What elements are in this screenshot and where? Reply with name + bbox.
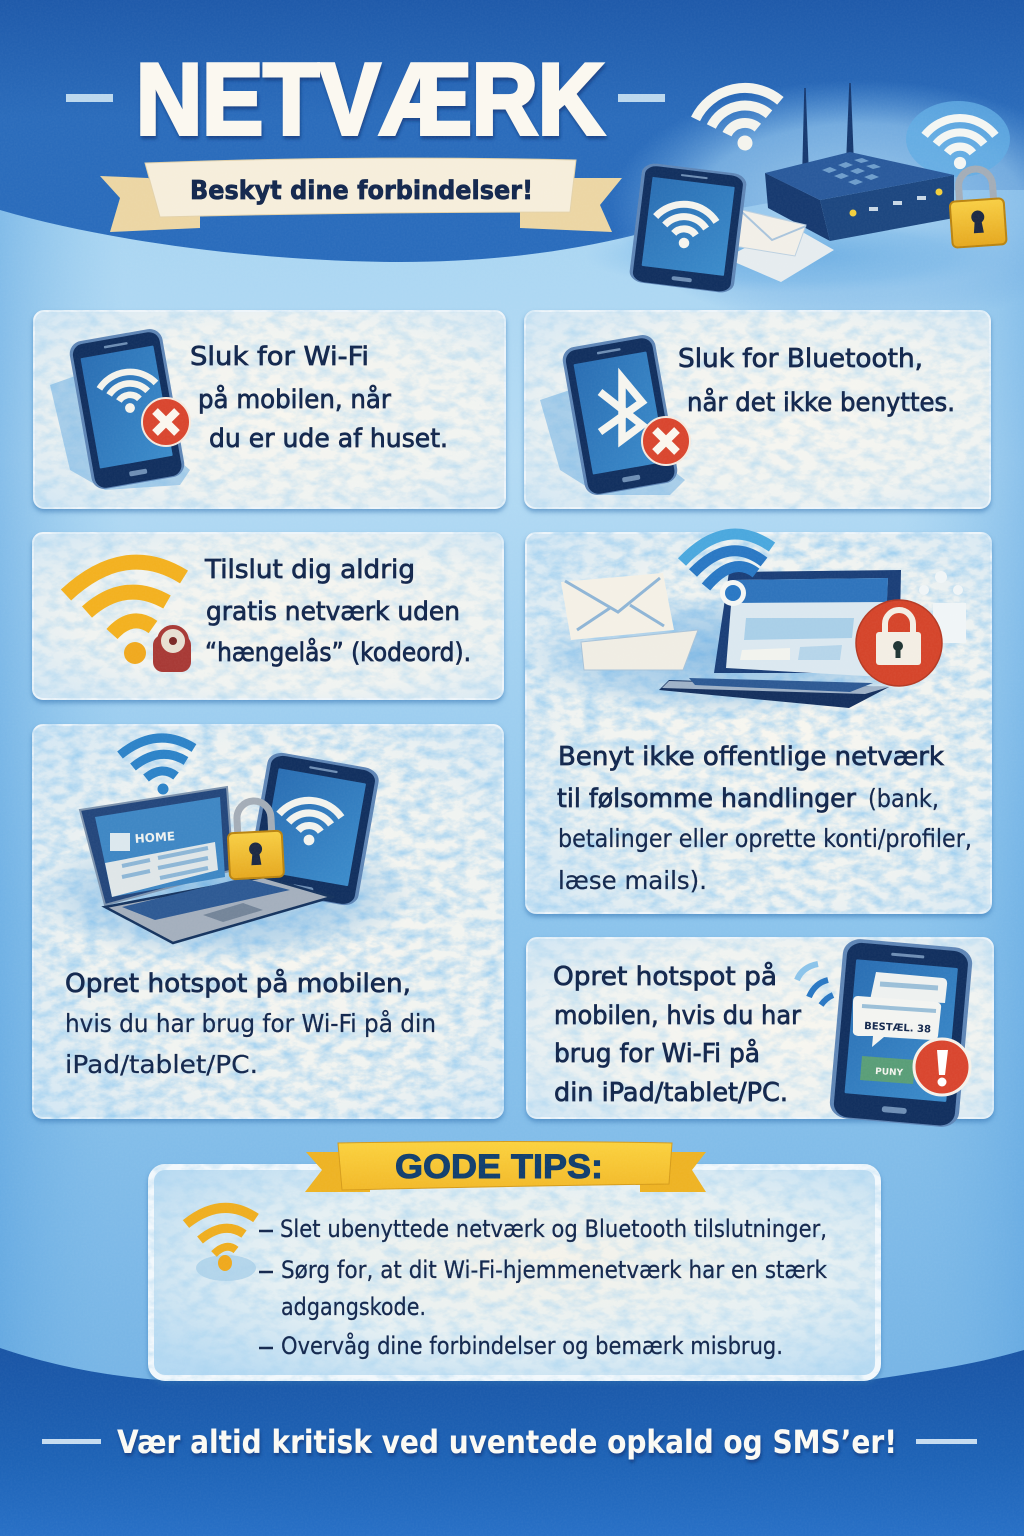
icon: wifi signal (691, 80, 789, 159)
icon: bluetooth (600, 378, 642, 440)
text: “hængelås” (kodeord). (205, 637, 471, 668)
text (678, 344, 955, 418)
header illustration: phone, router, lock and wifi (628, 80, 1010, 294)
text (190, 342, 448, 454)
subtitle ribbon: Beskyt dine forbindelser! (190, 176, 533, 206)
text: Sluk for Bluetooth, (678, 344, 923, 374)
title: NETVÆRK (136, 44, 604, 156)
icon: gold wifi (66, 562, 184, 634)
panel: tips: Overvåg dine forbindelser og bemærk misbrug. (281, 1331, 783, 1360)
icon: laptop (659, 570, 901, 708)
panel: bluetooth off (525, 311, 990, 508)
header band (0, 0, 1024, 262)
tips ribbon: GODE TIPS: (395, 1148, 603, 1186)
text: Slet ubenyttede netværk og Bluetooth tilslutninger, (280, 1215, 827, 1243)
text: brug for Wi-Fi på (554, 1038, 760, 1069)
header glow behind illustration (585, 80, 1024, 330)
icon: warning badge (914, 1039, 970, 1095)
panel: hotspot with phone (527, 938, 993, 1128)
icon: signal waves (797, 964, 833, 1005)
icon: phone with wifi and cross (68, 327, 186, 491)
text: du er ude af huset. (209, 424, 448, 454)
icon: phone with bluetooth and cross (561, 333, 679, 497)
icon: blue wifi (682, 534, 772, 606)
tips ribbon (305, 1142, 706, 1192)
icon: router (765, 83, 954, 241)
icon: phone shadow (540, 390, 685, 495)
panel: public networks: (bank, (868, 784, 939, 813)
text (553, 961, 801, 1108)
text: Opret hotspot på mobilen, (65, 968, 411, 999)
icon: phone with messages: BESTÆL. 38 (864, 1021, 931, 1035)
icon: phone with messages: PUNY (875, 1067, 904, 1078)
icon: tablet with wifi (245, 751, 381, 907)
subtitle ribbon (100, 158, 622, 232)
icon: red padlock (153, 627, 191, 672)
icon: laptop: HOME (134, 829, 176, 846)
icon: envelopes (725, 210, 834, 282)
icon: phone with messages (829, 938, 973, 1128)
panel: free networks (33, 533, 503, 699)
text (204, 555, 471, 668)
icon: decorative squares (919, 571, 966, 643)
bullet dashes (259, 1231, 273, 1348)
panel: wifi off (34, 311, 505, 508)
panel: tips: Sørg for, at dit Wi-Fi-hjemmenetværk har en stærk (281, 1256, 827, 1284)
text: på mobilen, når (198, 384, 391, 415)
icon: phone shadow (50, 375, 190, 490)
footer band (0, 1348, 1024, 1536)
text: gratis netværk uden (206, 597, 460, 627)
icon: phone with wifi (628, 162, 748, 294)
text: til følsomme handlinger (557, 784, 856, 814)
text: mobilen, hvis du har (554, 1001, 801, 1031)
panel: tips: adgangskode. (281, 1293, 426, 1321)
panel: public networks: betalinger eller oprette konti/profiler, (558, 824, 972, 853)
icon: laptop (80, 787, 332, 943)
text: Tilslut dig aldrig (204, 555, 415, 585)
panel: hotspot with laptop (30, 725, 503, 1118)
icon: red padlock badge (856, 600, 942, 686)
panel: public networks (520, 533, 991, 913)
icon: gold wifi (186, 1208, 256, 1281)
text: Sluk for Wi-Fi (190, 342, 369, 372)
panel: tips (151, 1142, 878, 1378)
icon: cloud wifi (906, 101, 1010, 177)
panel: public networks: læse mails). (558, 866, 707, 895)
text: din iPad/tablet/PC. (554, 1078, 788, 1108)
panel: hotspot with laptop: iPad/tablet/PC. (65, 1050, 258, 1079)
footer message: Vær altid kritisk ved uventede opkald og SMS’er! (117, 1423, 897, 1461)
text: Benyt ikke offentlige netværk (558, 742, 944, 772)
panel: hotspot with laptop: hvis du har brug for Wi-Fi på din (65, 1009, 436, 1038)
icon: padlock (947, 167, 1007, 248)
text: når det ikke benyttes. (687, 387, 955, 418)
icon: envelopes (561, 573, 698, 670)
text (557, 742, 944, 814)
icon: padlock (226, 800, 284, 879)
icon: blue wifi (120, 738, 194, 794)
text: Opret hotspot på (553, 961, 777, 992)
